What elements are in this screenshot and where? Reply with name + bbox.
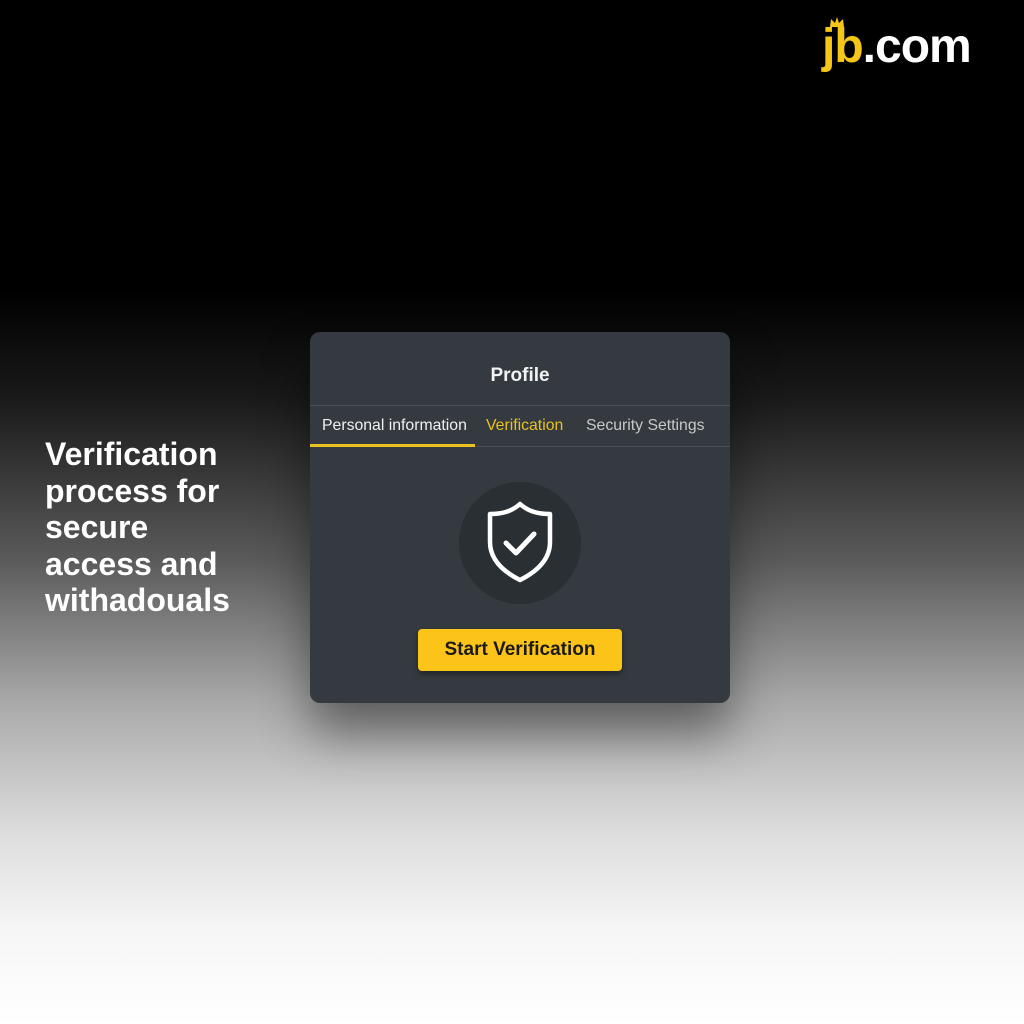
tab: Personal information: Personal information: [322, 417, 467, 434]
button: Start Verification: Start Verification: [444, 639, 596, 660]
icon: shield check: [459, 482, 581, 604]
tab: Security Settings: Security Settings: [586, 417, 705, 434]
title text: Verification process for secure access and withadouals: [45, 436, 230, 618]
logo: jb.com: [822, 20, 971, 73]
icon: crown: [830, 17, 844, 27]
button: Start Verification: [418, 629, 622, 671]
active tab underline: [310, 444, 475, 447]
tab: Verification: Verification: [486, 417, 563, 434]
tabs: [322, 417, 705, 434]
panel: profile card: [310, 332, 730, 703]
heading: Profile: Profile: [490, 365, 550, 386]
